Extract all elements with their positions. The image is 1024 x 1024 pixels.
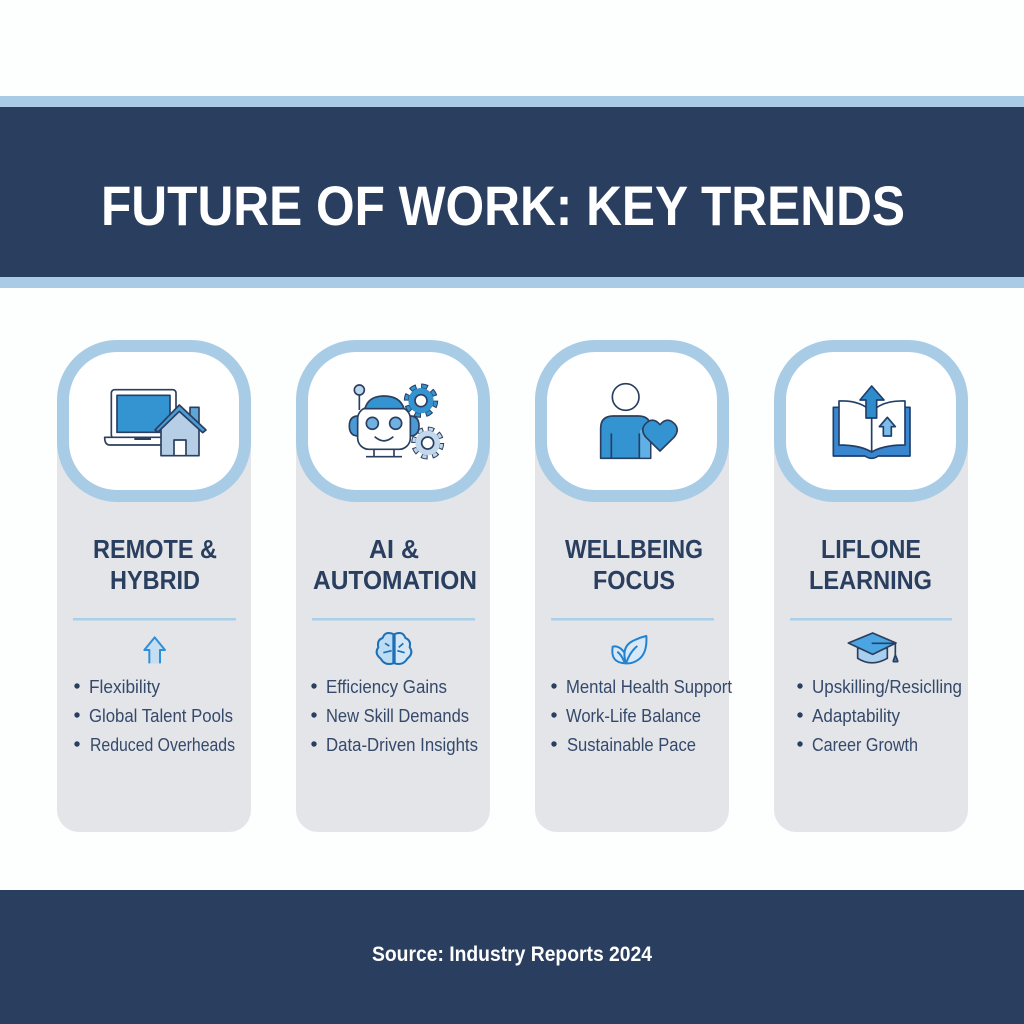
bullet list: remote: Reduced Overheads bbox=[90, 735, 235, 755]
bullet list: learning: Career Growth bbox=[812, 735, 918, 755]
panel: ai and automation bbox=[296, 346, 490, 832]
bullet list: wellbeing: Work-Life Balance bbox=[566, 706, 701, 726]
icon: person with heart bbox=[601, 384, 677, 458]
bullet list: remote: Global Talent Pools bbox=[89, 706, 233, 726]
title: FUTURE OF WORK: KEY TRENDS bbox=[101, 174, 905, 237]
icon frame: ai bbox=[302, 346, 484, 496]
bullet list: learning bbox=[797, 677, 962, 755]
panel: remote and hybrid bbox=[57, 346, 251, 832]
bullet list: learning: Adaptability bbox=[812, 706, 900, 726]
bullet list: ai: Efficiency Gains bbox=[326, 677, 447, 697]
icon: up arrow bbox=[144, 637, 165, 663]
bullet list: wellbeing: Sustainable Pace bbox=[567, 735, 696, 755]
bullet list: ai: Data-Driven Insights bbox=[326, 735, 478, 755]
heading: wellbeing bbox=[565, 534, 703, 595]
panel: lifelong learning bbox=[774, 346, 968, 832]
heading: ai: AUTOMATION bbox=[313, 565, 477, 595]
bullet list: learning: Upskilling/Resiclling bbox=[812, 677, 962, 697]
heading: remote: HYBRID bbox=[110, 565, 200, 595]
heading: ai: AI & bbox=[369, 534, 419, 564]
icon: open book with arrows bbox=[833, 386, 910, 458]
heading: learning: LEARNING bbox=[809, 565, 932, 595]
heading: learning: LIFLONE bbox=[821, 534, 921, 564]
heading: learning bbox=[809, 534, 932, 595]
icon: graduation cap bbox=[848, 633, 898, 663]
icon frame: learning bbox=[780, 346, 962, 496]
bullet list: ai: New Skill Demands bbox=[326, 706, 469, 726]
icon: leaves bbox=[612, 636, 646, 663]
icon: brain bbox=[377, 633, 411, 664]
icon frame: wellbeing bbox=[541, 346, 723, 496]
icon: robot and gears bbox=[349, 385, 442, 457]
bullet list: remote bbox=[74, 677, 235, 755]
panel: wellbeing focus bbox=[535, 346, 732, 832]
footer bbox=[0, 890, 1024, 1024]
header banner bbox=[0, 96, 1024, 288]
heading: ai bbox=[313, 534, 477, 595]
bullet list: wellbeing bbox=[551, 677, 732, 755]
heading: remote bbox=[93, 534, 217, 595]
bullet list: wellbeing: Mental Health Support bbox=[566, 677, 732, 697]
icon: laptop and house bbox=[105, 390, 206, 456]
bullet list: remote: Flexibility bbox=[89, 677, 160, 697]
heading: wellbeing: FOCUS bbox=[593, 565, 675, 595]
source note: Source: Industry Reports 2024 bbox=[372, 943, 652, 966]
heading: remote: REMOTE & bbox=[93, 534, 217, 564]
icon frame: remote bbox=[63, 346, 245, 496]
heading: wellbeing: WELLBEING bbox=[565, 534, 703, 564]
bullet list: ai bbox=[311, 677, 478, 755]
